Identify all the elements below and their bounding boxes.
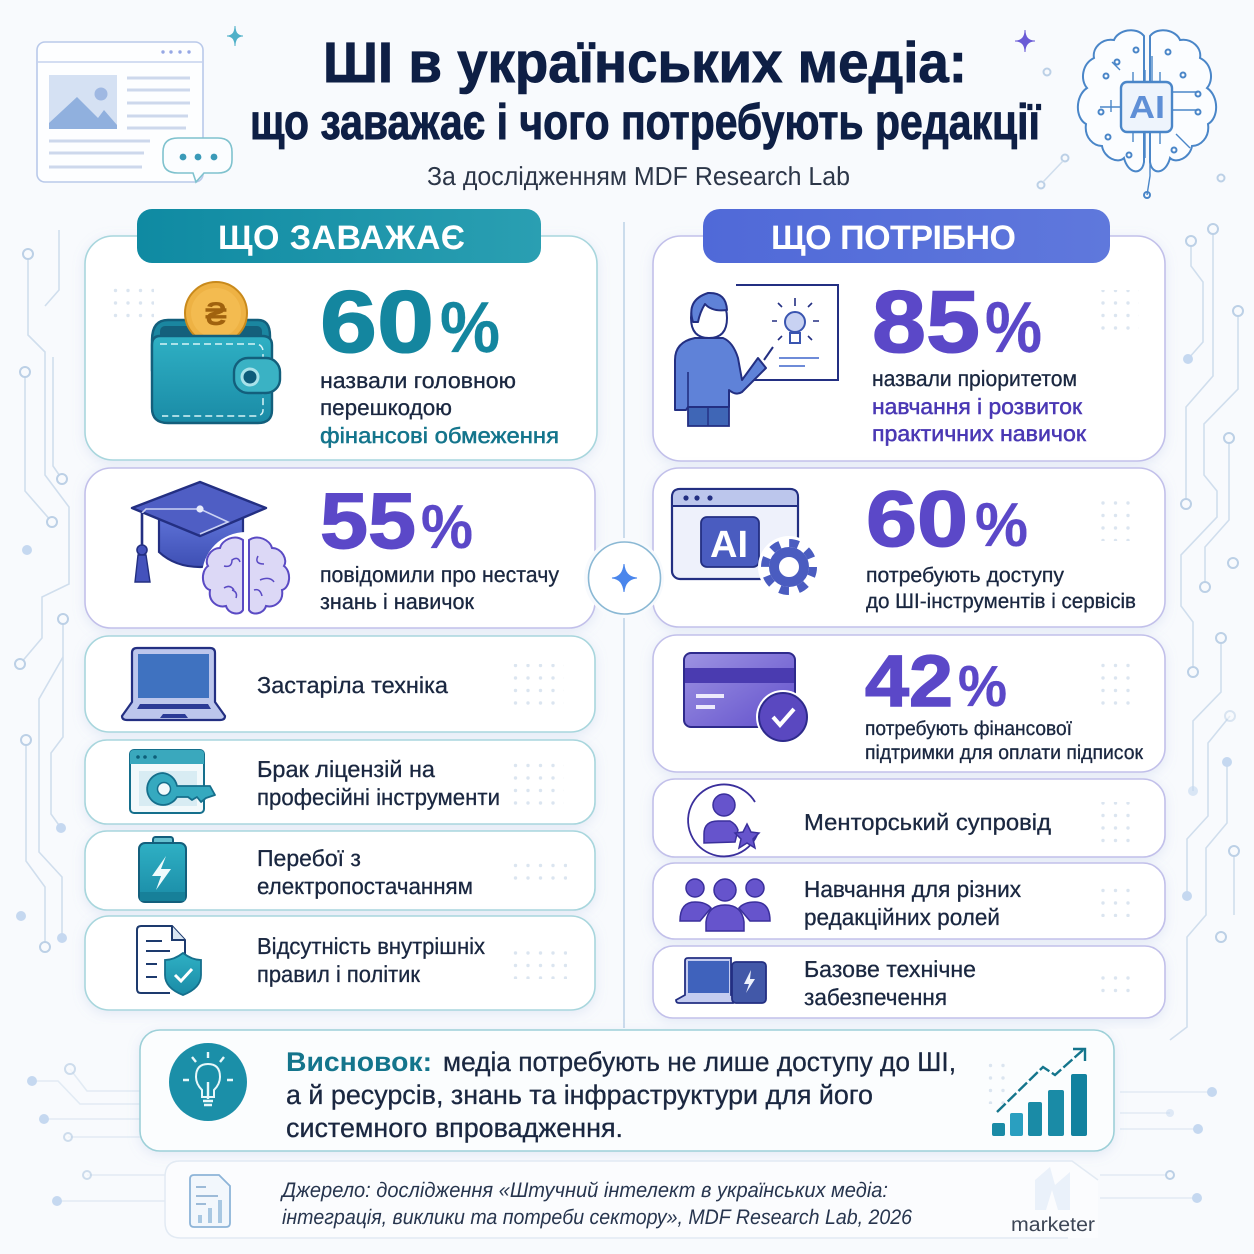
- icon: battery: [139, 837, 186, 902]
- card: outdated hardware: [85, 636, 595, 732]
- text: conclusion: [286, 1047, 956, 1143]
- text: lack of licences: Брак ліцензій на: [257, 756, 435, 782]
- text: basic hardware: Базове технічне: [804, 956, 976, 982]
- title: [250, 31, 1041, 150]
- panel: source: [165, 1161, 1098, 1238]
- text: basic hardware: [804, 956, 976, 1010]
- text: power outages: Перебої з: [257, 845, 361, 871]
- text: power outages: електропостачанням: [257, 873, 473, 899]
- small header connector circles: [1038, 68, 1224, 188]
- card: lack of licences: [85, 740, 595, 824]
- icon: AI brain: [1078, 30, 1216, 198]
- chart: rising bars and arrow: [985, 1049, 1087, 1136]
- text: mentoring: Менторський супровід: [804, 809, 1052, 835]
- text: subscription support: потребують фінансової: [865, 718, 1072, 740]
- heading: what hinders: ЩО ЗАВАЖАЄ: [218, 219, 465, 257]
- text: conclusion: медіа потребують не лише доступу до ШІ,: [443, 1047, 956, 1077]
- central divider: [623, 222, 625, 1028]
- text: priority training: [872, 366, 1086, 446]
- text: no internal policies: [257, 933, 485, 987]
- card: mentoring: [653, 779, 1165, 857]
- text: no internal policies: Відсутність внутрішніх: [257, 933, 485, 959]
- icon: AI brain: AI: [1129, 89, 1165, 125]
- stat: 55%: 55: [320, 476, 416, 565]
- icon: wallet with coin: ₴: [205, 295, 227, 332]
- heading: what hinders: [137, 209, 541, 263]
- text: knowledge shortage: повідомили про нестачу: [320, 562, 559, 587]
- card: 42% subscription support: [653, 635, 1165, 772]
- icon: wallet with coin: [152, 282, 280, 423]
- stat: 60%: [320, 272, 500, 371]
- icon: violet sparkle: [1015, 30, 1035, 52]
- text: subscription support: [865, 718, 1143, 764]
- text: priority training: практичних навичок: [872, 421, 1086, 446]
- stat: 60%: 60: [320, 272, 434, 371]
- text: priority training: навчання і розвиток: [872, 394, 1082, 419]
- icon: bank card with check: [684, 653, 810, 744]
- text: role-based training: Навчання для різних: [804, 876, 1021, 902]
- card: role-based training: [653, 863, 1165, 939]
- icon: lightbulb: [169, 1043, 247, 1121]
- icon: AI window with gear: AI: [710, 524, 748, 566]
- card: 60% financial constraints: [85, 236, 597, 460]
- icon: teacher at board: [675, 285, 838, 426]
- stat: 60%: [866, 474, 1028, 563]
- text: role-based training: [804, 876, 1021, 930]
- text: knowledge shortage: знань і навичок: [320, 589, 474, 614]
- text: conclusion: Висновок:: [286, 1047, 432, 1077]
- text: priority training: назвали пріоритетом: [872, 366, 1077, 391]
- logo: marketer: marketer: [1011, 1214, 1095, 1236]
- card: 85% training: [653, 236, 1165, 461]
- title: що заважає і чого потребують редакції: [250, 94, 1041, 150]
- icon: document with shield: [137, 926, 201, 995]
- stat: 55%: %: [421, 493, 473, 562]
- stat: 42%: [865, 641, 1007, 722]
- stat: 85%: 85: [872, 272, 980, 371]
- icon: AI window with gear: [672, 489, 820, 598]
- stat: 60%: %: [975, 491, 1028, 560]
- icon: document with chart: [190, 1175, 230, 1227]
- card: 60% tool access: [653, 468, 1165, 627]
- text: source: інтеграція, виклики та потреби сектору», MDF Research Lab, 2026: [282, 1206, 912, 1229]
- text: no internal policies: правил і політик: [257, 961, 421, 987]
- stat: 60%: %: [440, 288, 500, 368]
- text: conclusion: системного впровадження.: [286, 1113, 623, 1143]
- text: financial constraints: фінансові обмеження: [320, 423, 559, 448]
- card: 55% knowledge shortage: [85, 468, 595, 628]
- text: role-based training: редакційних ролей: [804, 904, 1000, 930]
- text: source: [280, 1179, 912, 1229]
- text: knowledge shortage: [320, 562, 559, 614]
- subtitle: За дослідженням MDF Research Lab: [427, 161, 850, 191]
- icon: news page with chat bubble: [37, 42, 232, 182]
- text: financial constraints: перешкодою: [320, 395, 452, 420]
- icon: laptop and battery: [676, 958, 766, 1003]
- icon: teal sparkle: [227, 26, 243, 46]
- text: lack of licences: [257, 756, 500, 810]
- icon: mentor with star: [688, 784, 759, 856]
- card: no internal policies: [85, 916, 595, 1010]
- icon: graduation cap and brain: [132, 482, 290, 620]
- icon: central sparkle badge: [584, 538, 664, 618]
- stat: 55%: [320, 476, 473, 565]
- heading: what is needed: [703, 209, 1110, 263]
- icon: team: [680, 879, 770, 931]
- text: subscription support: підтримки для оплати підписок: [865, 742, 1143, 764]
- logo: marketer: [1011, 1167, 1095, 1236]
- text: conclusion: а й ресурсів, знань та інфраструктури для його: [286, 1080, 873, 1110]
- icon: window with key: [130, 750, 215, 813]
- text: power outages: [257, 845, 473, 899]
- stat: 85%: %: [985, 288, 1042, 368]
- stat: 42%: %: [958, 654, 1007, 719]
- text: lack of licences: професійні інструменти: [257, 784, 500, 810]
- card: power outages: [85, 831, 595, 910]
- panel: what is needed: [653, 209, 1165, 1018]
- text: financial constraints: назвали головною: [320, 368, 516, 393]
- card: basic hardware: [653, 946, 1165, 1018]
- text: financial constraints: [320, 368, 559, 448]
- heading: what is needed: ЩО ПОТРІБНО: [771, 219, 1016, 257]
- text: tool access: до ШІ-інструментів і сервісів: [866, 590, 1136, 613]
- left circuit decoration: [15, 230, 165, 1206]
- stat: 42%: 42: [865, 641, 953, 722]
- title: ШІ в українських медіа:: [323, 31, 967, 95]
- text: basic hardware: забезпечення: [804, 984, 947, 1010]
- stat: 85%: [872, 272, 1042, 371]
- panel: what hinders: [85, 209, 597, 1010]
- icon: laptop: [122, 648, 225, 720]
- text: source: Джерело: дослідження «Штучний інтелект в українських медіа:: [280, 1179, 888, 1202]
- panel: conclusion: [140, 1030, 1114, 1151]
- right circuit decoration: [1100, 224, 1243, 1203]
- stat: 60%: 60: [866, 474, 968, 563]
- text: tool access: [866, 564, 1136, 613]
- text: tool access: потребують доступу: [866, 564, 1064, 587]
- text: outdated hardware: Застаріла техніка: [257, 672, 448, 698]
